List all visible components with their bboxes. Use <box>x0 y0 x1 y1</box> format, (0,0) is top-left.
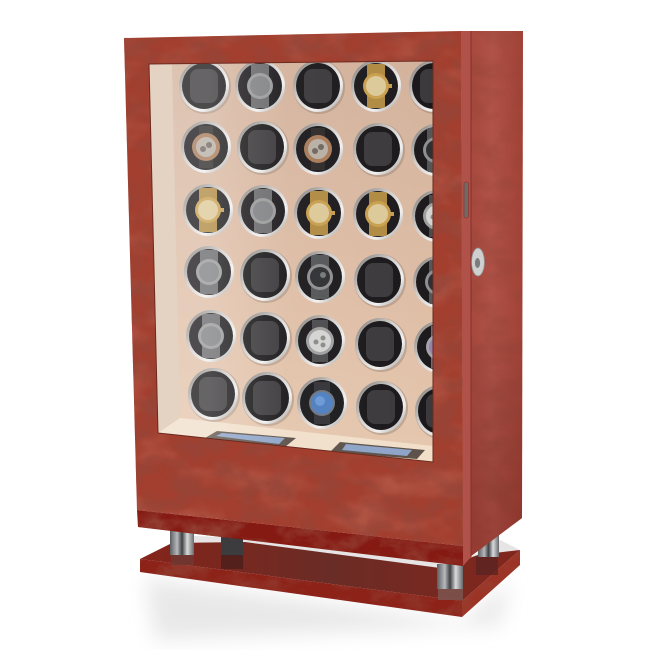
watch slots: row 3 <box>183 184 432 242</box>
pillar: back left <box>221 535 243 556</box>
watch slots: row 1 <box>179 62 432 114</box>
slot latch <box>464 182 468 218</box>
interior back panel <box>172 62 432 446</box>
watch slots: row 4 <box>184 246 432 308</box>
cabinet side panel <box>461 28 525 568</box>
cabinet bottom band <box>135 508 465 568</box>
base top surface <box>140 542 520 601</box>
watch slots: row 2 <box>181 121 432 177</box>
pillar: front left <box>170 530 194 555</box>
control display right <box>330 442 425 459</box>
bottom interior wall <box>158 418 433 462</box>
base plinth <box>135 535 525 620</box>
watch slots: row 5 <box>186 310 432 372</box>
pillar: back right <box>478 535 499 557</box>
window interior <box>150 62 432 462</box>
illustration: watch winder cabinet <box>124 31 523 642</box>
chrome pillars <box>170 530 499 600</box>
door edge strip <box>461 31 471 566</box>
pillar: front right <box>437 564 463 589</box>
watch slots: row 6 <box>188 368 432 438</box>
glass reflection <box>150 63 302 446</box>
floor gap behind pillars <box>172 535 520 600</box>
base front edge <box>140 559 462 617</box>
floor shadow <box>145 578 510 640</box>
base side edge <box>462 550 520 617</box>
window inner edge <box>149 61 433 462</box>
control display left <box>205 431 296 447</box>
cabinet front frame <box>120 28 466 548</box>
key lock <box>472 248 484 276</box>
left interior wall <box>150 64 178 320</box>
